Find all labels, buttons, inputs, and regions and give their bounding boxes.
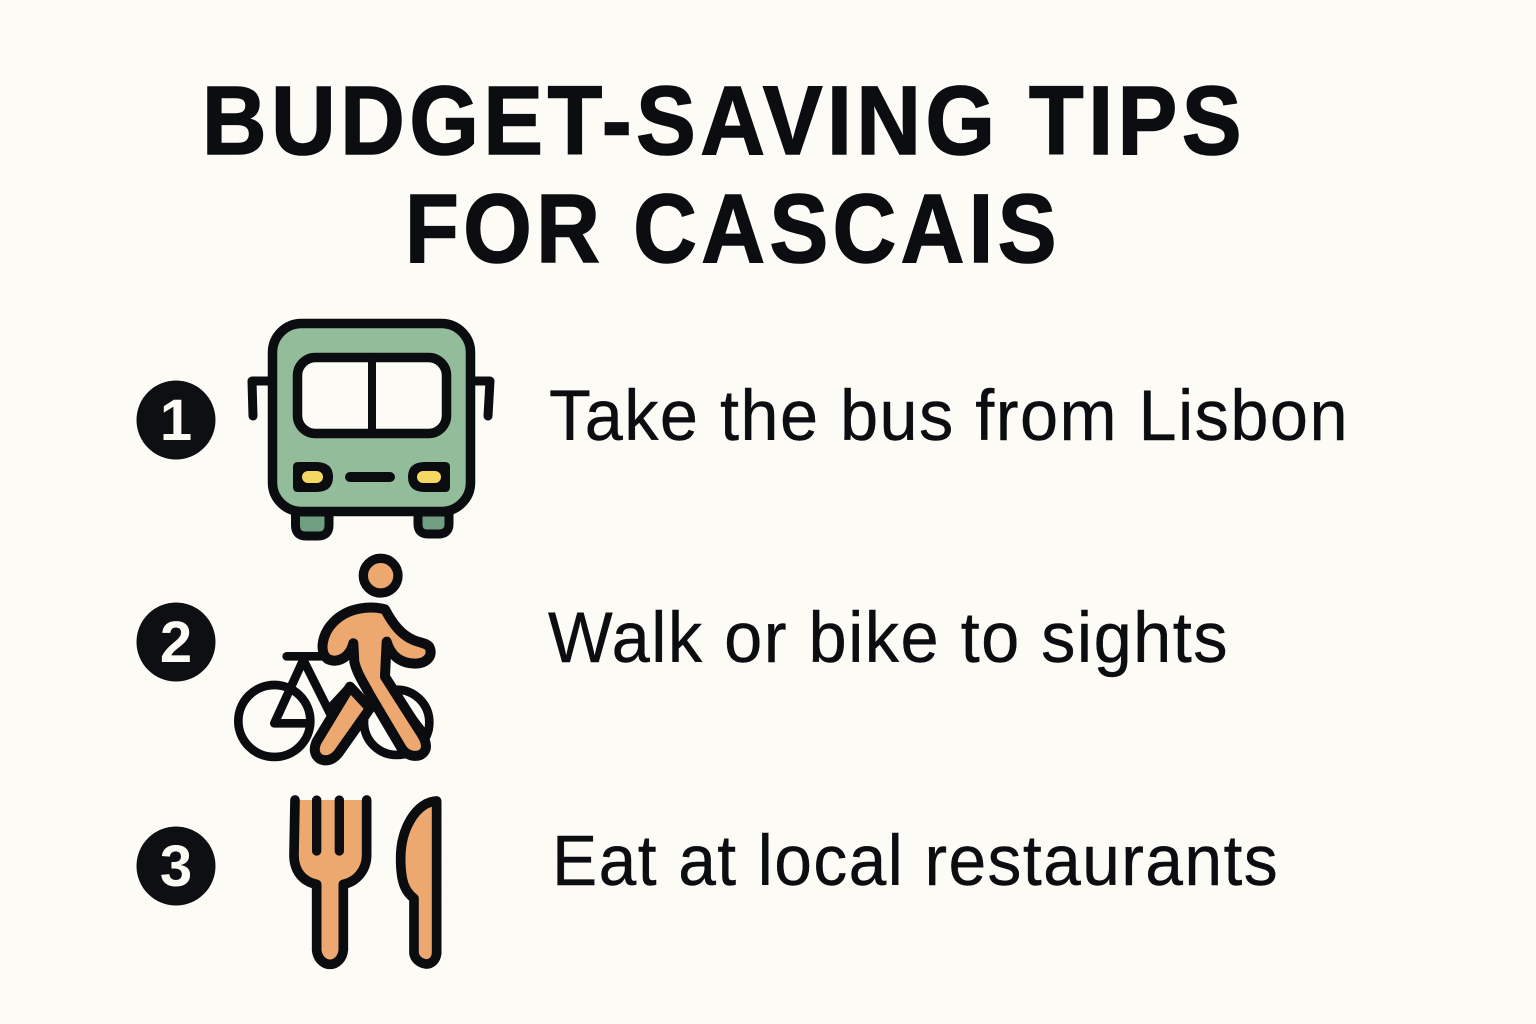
icon: fork and knife <box>294 800 437 964</box>
number badge 2: 2 <box>160 610 192 675</box>
right wheel <box>418 512 449 534</box>
windshield <box>298 358 446 434</box>
tip 3 text: Eat at local restaurants <box>552 822 1279 901</box>
number badge 2 <box>136 602 216 682</box>
title: FOR CASCAIS <box>405 174 1061 283</box>
right headlight <box>408 462 450 492</box>
icon: bus <box>252 324 490 536</box>
title <box>202 66 1246 283</box>
left mirror <box>252 381 268 416</box>
number badge 3: 3 <box>160 834 192 899</box>
number badge 3 <box>136 826 216 906</box>
walker head <box>363 558 398 593</box>
bus body <box>272 324 470 512</box>
fork <box>294 800 367 964</box>
tip 2 text: Walk or bike to sights <box>548 599 1229 678</box>
left headlight <box>293 462 333 492</box>
icon: walker and bicycle <box>238 558 431 760</box>
number badge 1: 1 <box>160 388 192 453</box>
walker body <box>323 608 431 756</box>
right mirror <box>475 381 490 416</box>
bicycle <box>238 656 429 757</box>
windshield divider <box>368 358 376 433</box>
left wheel <box>296 512 329 536</box>
walker back leg <box>315 687 370 760</box>
knife <box>401 801 437 964</box>
number badge 1 <box>136 380 216 460</box>
grille bar <box>350 472 390 482</box>
title: BUDGET-SAVING TIPS <box>202 66 1246 175</box>
tip 1 text: Take the bus from Lisbon <box>549 377 1349 456</box>
